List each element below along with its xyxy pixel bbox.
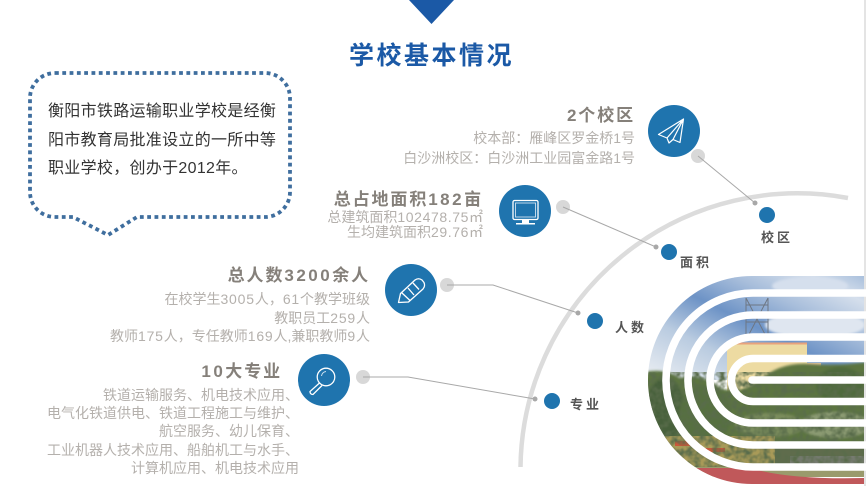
- block: campuses: 校本部：雁峰区罗金桥1号: [473, 130, 635, 146]
- majors list: 工业机器人技术应用、船舶机工与水手、: [47, 442, 299, 458]
- block: people: 教师175人，专任教师169人,兼职教师9人: [110, 328, 370, 344]
- label: majors: 专业: [570, 397, 602, 412]
- majors list: 铁道运输服务、机电技术应用、: [103, 387, 299, 403]
- blue dot: majors: [544, 393, 560, 409]
- top triangle: [409, 0, 454, 24]
- blue dot: area: [661, 244, 677, 260]
- connector: majors: [356, 370, 538, 402]
- block: campuses: [403, 106, 635, 166]
- white track lines: [666, 293, 866, 467]
- majors list: 电气化铁道供电、铁道工程施工与维护、: [47, 405, 299, 421]
- blue dot: campus: [759, 207, 775, 223]
- photo: trees: [645, 362, 866, 450]
- block: majors: 10大专业: [201, 362, 282, 381]
- block: area: 生均建筑面积29.76㎡: [347, 224, 483, 240]
- icon: monitor: [499, 185, 551, 237]
- connector: people: [440, 278, 580, 316]
- photo: building: [727, 344, 807, 392]
- label: people: 人数: [615, 320, 647, 335]
- bubble text: [48, 102, 276, 177]
- icon: magnifier: [298, 354, 350, 406]
- photo: tower: [746, 298, 768, 340]
- block: campuses: 2个校区: [567, 106, 635, 125]
- bubble text: 职业学校，创办于2012年。: [48, 160, 248, 177]
- bubble text: 阳市教育局批准设立的一所中等: [48, 132, 276, 148]
- photo: lower building: [665, 436, 775, 467]
- connector: campus: [691, 149, 758, 206]
- majors list: 航空服务、幼儿保育、: [159, 423, 299, 439]
- photo: sky: [640, 270, 866, 380]
- photo: ground: [695, 467, 864, 477]
- block: area: [327, 190, 483, 240]
- label: area: 面积: [680, 255, 712, 270]
- majors list: 计算机应用、机电技术应用: [131, 460, 299, 476]
- photo: foliage texture: [645, 372, 866, 467]
- block: area: 总建筑面积102478.75㎡: [327, 209, 483, 225]
- majors list: [47, 387, 299, 476]
- block: area: 总占地面积182亩: [334, 190, 483, 209]
- block: people: [110, 266, 370, 344]
- block: campuses: 白沙洲校区：白沙洲工业园富金路1号: [403, 150, 635, 166]
- block: people: 总人数3200余人: [228, 266, 370, 285]
- block: people: 教职员工259人: [274, 310, 370, 326]
- block: people: 在校学生3005人，61个教学班级: [164, 291, 370, 307]
- title: 学校基本情况: [349, 42, 514, 70]
- large arc: [520, 193, 848, 467]
- connector: area: [556, 200, 658, 250]
- icon: pencil: [385, 264, 437, 316]
- speech bubble: [30, 73, 290, 235]
- bubble text: 衡阳市铁路运输职业学校是经衡: [48, 103, 276, 120]
- icon: paper plane: [648, 105, 700, 157]
- label: campus: 校区: [761, 230, 793, 245]
- campus photo tracks: [640, 270, 866, 486]
- blue dot: people: [587, 313, 603, 329]
